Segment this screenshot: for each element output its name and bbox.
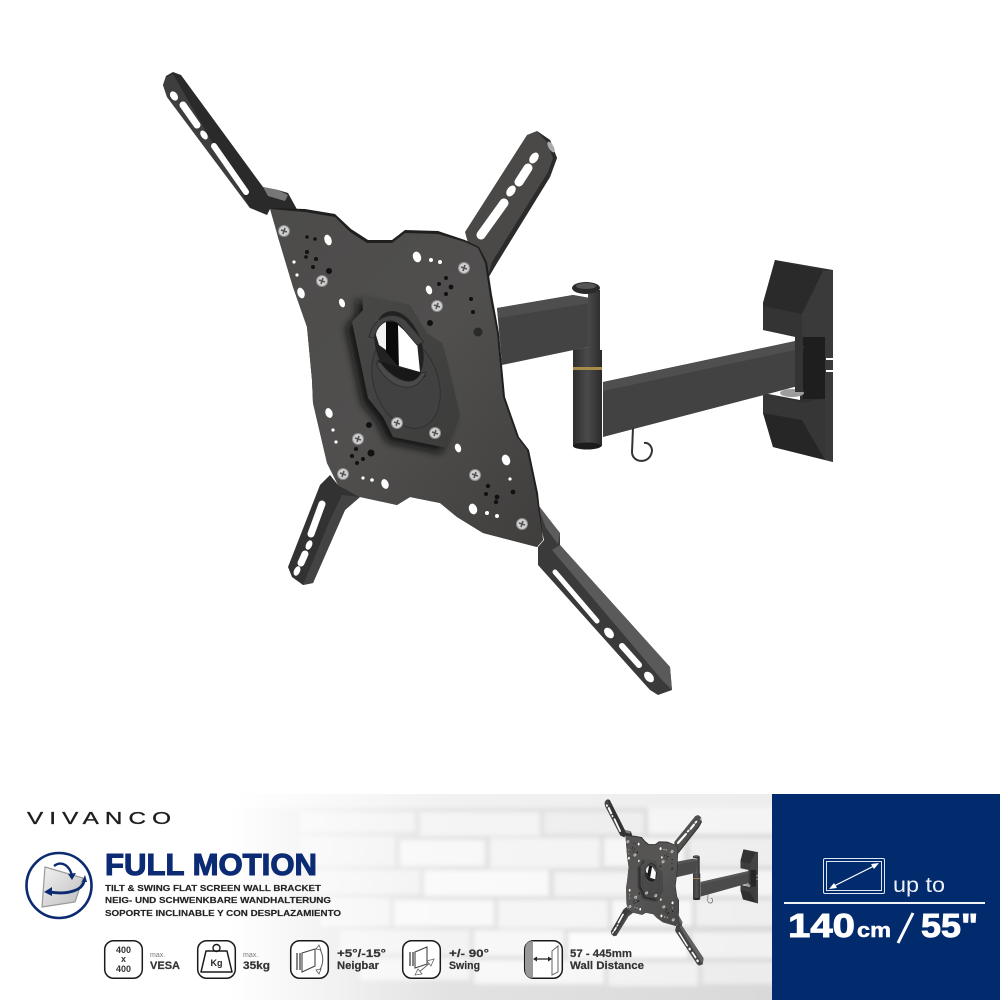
heading: FULL MOTION: FULL MOTION bbox=[105, 848, 317, 882]
label: 140cm / 55 inch: 55" bbox=[921, 907, 978, 944]
banner: thumbnail of the bracket bbox=[572, 799, 758, 966]
feature: tilt bbox=[291, 941, 386, 978]
product photo: full motion wall bracket bbox=[163, 72, 834, 695]
feature: swing: Swing bbox=[449, 960, 480, 972]
feature: VESA: VESA bbox=[150, 960, 180, 972]
brand logo: VIVANCO: VIVANCO bbox=[27, 808, 171, 828]
feature: swing: +/- 90° bbox=[449, 948, 489, 960]
label: 140cm / 55 inch: 140 bbox=[788, 907, 855, 944]
feature: VESA bbox=[105, 941, 180, 978]
icon: screen diagonal bbox=[824, 858, 884, 894]
feature: tilt: Neigbar bbox=[337, 960, 380, 972]
feature: wall distance: 57 - 445mm bbox=[570, 948, 632, 960]
feature: swing bbox=[403, 941, 489, 978]
feature: wall distance: Wall Distance bbox=[570, 960, 644, 972]
feature: VESA: max. bbox=[150, 952, 165, 959]
feature: max weight bbox=[198, 941, 270, 978]
subtitle: English: TILT & SWING FLAT SCREEN WALL BRACKET bbox=[105, 884, 321, 893]
panel: screen size bbox=[772, 794, 1000, 1000]
subtitle: Spanish: SOPORTE INCLINABLE Y CON DESPLAZAMIENTO bbox=[105, 909, 342, 918]
feature: VESA: x bbox=[121, 954, 126, 964]
feature: max weight: max. bbox=[243, 952, 258, 959]
feature: max weight: 35kg bbox=[243, 960, 270, 972]
feature: max weight: Kg bbox=[210, 958, 222, 968]
banner: brick wall background bbox=[293, 794, 772, 1000]
feature: VESA: 400 bbox=[116, 964, 131, 974]
label: 140cm / 55 inch: cm bbox=[857, 920, 891, 942]
feature: wall distance bbox=[525, 941, 644, 978]
feature: tilt: +5°/-15° bbox=[337, 948, 386, 960]
feature: VESA: 400 bbox=[116, 945, 131, 955]
subtitle lines bbox=[105, 884, 342, 918]
label: up to: up to bbox=[893, 873, 945, 897]
icon: full motion circle bbox=[26, 853, 92, 918]
subtitle: German: NEIG- UND SCHWENKBARE WANDHALTERUNG bbox=[105, 896, 331, 905]
label: 140cm / 55 inch bbox=[788, 907, 978, 944]
